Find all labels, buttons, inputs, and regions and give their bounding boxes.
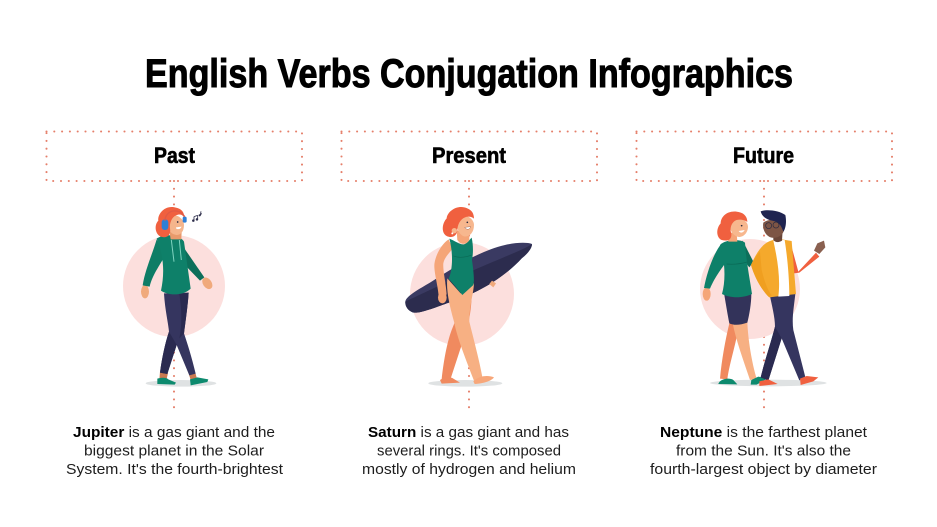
heading box: future (636, 132, 892, 181)
title: English Verbs Conjugation Infographics (145, 52, 793, 96)
text block: Saturn: several rings. It's composed (377, 444, 561, 460)
icon: music notes (192, 211, 202, 221)
text block: Jupiter: biggest planet in the Solar (84, 444, 264, 460)
text block: Jupiter: Jupiter is a gas giant and the (73, 425, 275, 441)
text block: Neptune: fourth-largest object by diameter (650, 462, 877, 478)
text block: Neptune (650, 425, 877, 478)
illustration: couple walking (700, 181, 827, 410)
text block: Neptune: Neptune is the farthest planet (660, 425, 867, 441)
illustration: woman with headphones (123, 181, 225, 410)
heading box: past: Past (154, 143, 196, 168)
illustration: woman with surfboard (405, 181, 532, 410)
panel: past (46, 132, 302, 478)
panel: future (636, 132, 892, 478)
text block: Saturn (362, 425, 576, 478)
text block: Jupiter (66, 425, 283, 478)
text block: Neptune: from the Sun. It's also the (676, 444, 851, 460)
heading box: past (46, 132, 302, 181)
heading box: present: Present (432, 143, 507, 168)
panel: present (342, 132, 597, 478)
text block: Jupiter: System. It's the fourth-brightest (66, 462, 283, 478)
text block: Saturn: mostly of hydrogen and helium (362, 462, 576, 478)
heading box: future: Future (733, 143, 794, 168)
text block: Saturn: Saturn is a gas giant and has (368, 425, 569, 441)
heading box: present (342, 132, 597, 181)
